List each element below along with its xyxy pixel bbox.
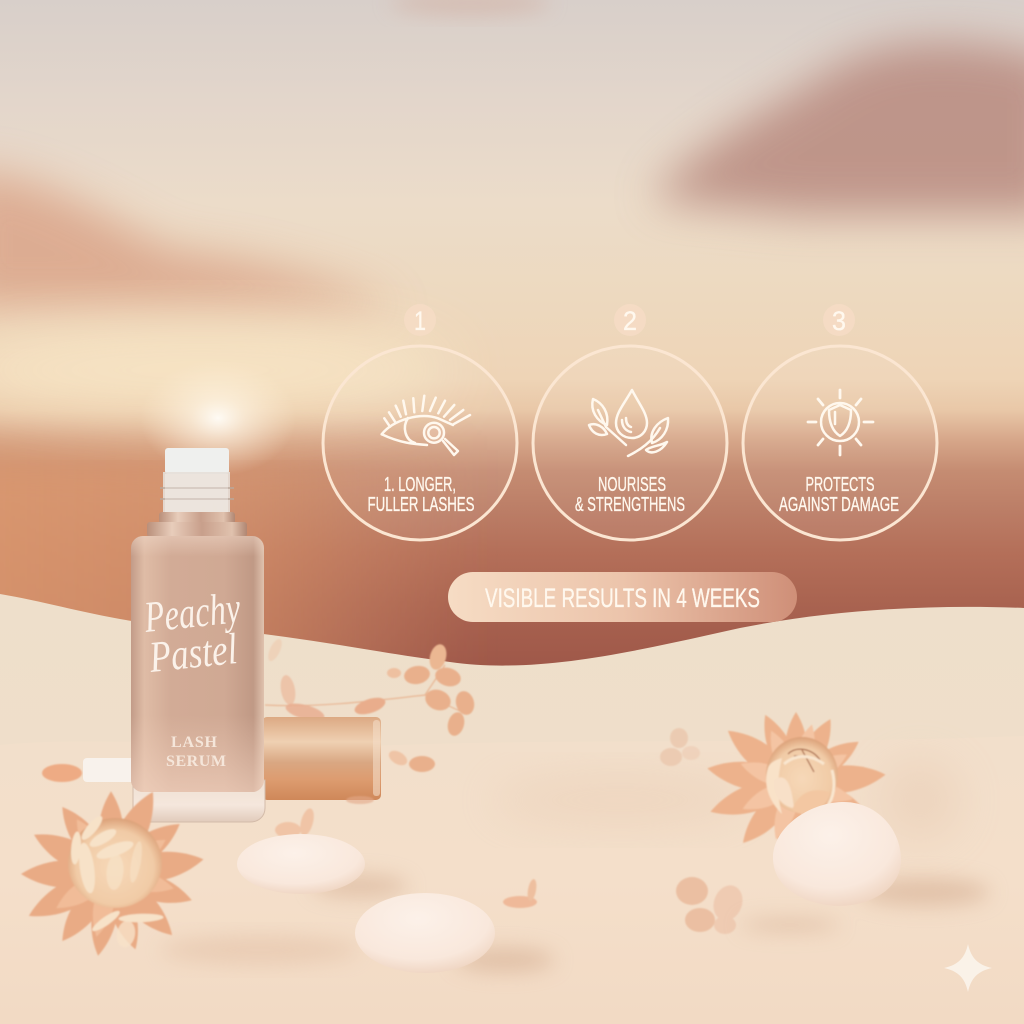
text: benefit 1 label: FULLER LASHES (368, 494, 474, 516)
text: product name (166, 734, 226, 770)
icon: sun and shield (808, 390, 873, 455)
text: product name: LASH (171, 734, 218, 751)
text: benefit 2 label: NOURISES (598, 474, 666, 496)
text: benefit 1 label (368, 474, 474, 516)
panel: benefit 1 (323, 346, 517, 540)
step badge 3: 3 (832, 306, 846, 336)
stone: small left (237, 834, 365, 894)
object: lying bottle cap (262, 717, 381, 800)
panel: benefit 3 (743, 346, 937, 540)
text: brand script: Pastel (146, 624, 240, 682)
step badge 3 (823, 304, 855, 336)
object: serum bottle (131, 448, 265, 822)
text: benefit 3 label (779, 474, 899, 516)
background: front sand floor (0, 736, 1024, 1024)
text: product name: SERUM (166, 753, 226, 770)
step badge 2: 2 (623, 306, 637, 336)
step badge 1: 1 (414, 306, 426, 336)
icon: sparkle watermark (944, 944, 992, 992)
text: benefit 3 label: AGAINST DAMAGE (779, 494, 899, 516)
step badge 1 (404, 304, 436, 336)
text: benefit 2 label: & STRENGTHENS (575, 494, 685, 516)
text: brand script: Peachy (141, 583, 243, 642)
object: lash brush (42, 758, 135, 782)
bottle neck (160, 472, 234, 514)
step badge 2 (614, 304, 646, 336)
stone shadows (312, 875, 990, 972)
flower: left (21, 786, 206, 958)
decoration: background sprig (265, 637, 477, 772)
bottle cap core (165, 448, 229, 474)
stone: bottom centre (355, 893, 495, 973)
text: benefit 2 label (575, 474, 685, 516)
callout: results pill (448, 572, 797, 622)
stone: right (773, 802, 901, 906)
icon: eye with magnifier (382, 396, 470, 455)
flower: right (705, 710, 887, 860)
glass base (133, 780, 265, 822)
bottle body (131, 536, 264, 792)
decoration: small leaves near front (275, 728, 747, 934)
text: benefit 1 label: 1. LONGER, (384, 474, 456, 496)
callout: results pill: VISIBLE RESULTS IN 4 WEEKS (485, 583, 760, 613)
background: back sand dune (0, 594, 1024, 1024)
panel: benefit 2 (533, 346, 727, 540)
text: benefit 3 label: PROTECTS (806, 474, 874, 496)
icon: droplet and leaves (589, 390, 668, 456)
text: brand script (141, 583, 243, 682)
